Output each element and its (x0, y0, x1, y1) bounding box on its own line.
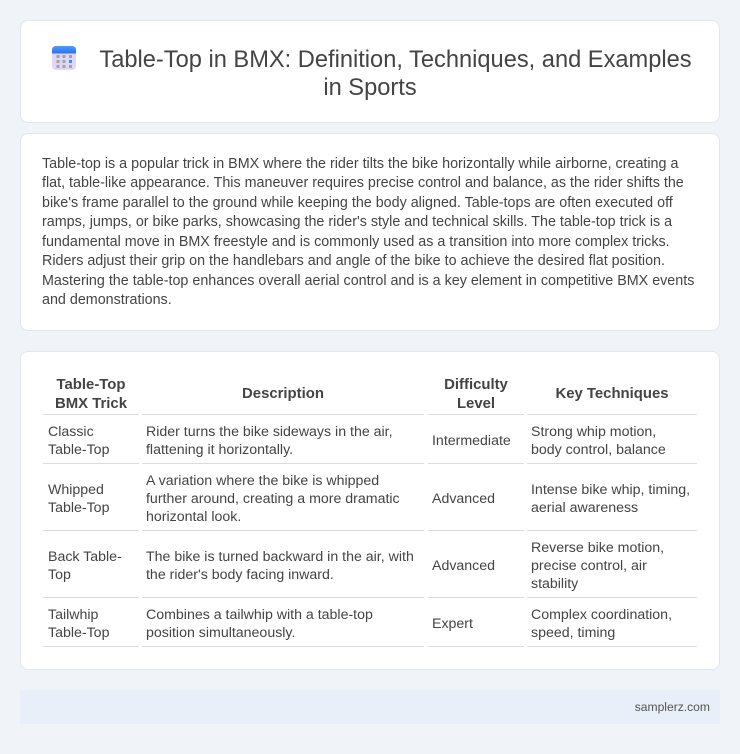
intro text: ramps, jumps, or bike parks, showcasing the rider's style and technical skills. The table-top trick is a (42, 214, 672, 230)
row: Classic Table-Top: Intermediate (432, 433, 511, 449)
intro text: Riders adjust their grip on the handlebars and angle of the bike to achieve the desired flat position. (42, 253, 665, 269)
row: Back Table-Top: Top (48, 567, 71, 583)
row: Back Table-Top: The bike is turned backward in the air, with (146, 549, 414, 565)
table header: Level (457, 396, 495, 412)
table header: Table-Top (57, 377, 125, 393)
table header: Difficulty (444, 377, 508, 393)
intro text: bike's frame parallel to the ground while keeping the body aligned. Table-tops are often executed off (42, 195, 673, 211)
row: Classic Table-Top: Table-Top (48, 442, 109, 458)
row: Back Table-Top: precise control, air (531, 558, 647, 574)
panel: intro paragraph (20, 133, 720, 331)
row: Tailwhip Table-Top: Combines a tailwhip with a table-top (146, 607, 373, 623)
intro text (42, 156, 694, 308)
row: Tailwhip Table-Top: Expert (432, 616, 473, 632)
table header (55, 377, 669, 412)
title: Table-Top in BMX: Definition, Techniques, and Examples (99, 47, 692, 73)
row: Tailwhip Table-Top: position simultaneously. (146, 625, 295, 641)
row: Whipped Table-Top (48, 473, 690, 525)
row: Tailwhip Table-Top: Tailwhip (48, 607, 98, 623)
title card (20, 20, 720, 123)
row: Back Table-Top: stability (531, 576, 578, 592)
icon: calendar grid (52, 46, 76, 70)
row: Classic Table-Top: Rider turns the bike sideways in the air, (146, 424, 393, 440)
title (99, 47, 692, 101)
row: Classic Table-Top: body control, balance (531, 442, 666, 458)
row: Back Table-Top: Reverse bike motion, (531, 540, 664, 556)
title: in Sports (323, 75, 417, 101)
row: Tailwhip Table-Top (48, 607, 672, 641)
row: Classic Table-Top: Strong whip motion, (531, 424, 656, 440)
row: Whipped Table-Top: further around, creating a more dramatic (146, 491, 400, 507)
row: Back Table-Top: the rider's body facing inward. (146, 567, 334, 583)
row: Tailwhip Table-Top: speed, timing (531, 625, 615, 641)
footer bar (20, 690, 720, 724)
row: Back Table-Top: Back Table- (48, 549, 122, 565)
table header: Description (242, 386, 324, 402)
row: Whipped Table-Top: Advanced (432, 491, 495, 507)
row: Classic Table-Top: Classic (48, 424, 94, 440)
table header: Key Techniques (555, 386, 669, 402)
intro text: flat, table-like appearance. This maneuver requires precise control and balance, as the rider shifts the (42, 175, 684, 191)
row: Tailwhip Table-Top: Complex coordination, (531, 607, 672, 623)
row: Whipped Table-Top: horizontal look. (146, 509, 241, 525)
row: Tailwhip Table-Top: Table-Top (48, 625, 109, 641)
row: Whipped Table-Top: Table-Top (48, 500, 109, 516)
row: Classic Table-Top (48, 424, 666, 458)
table: BMX tricks (43, 377, 697, 647)
row: Whipped Table-Top: Intense bike whip, timing, (531, 482, 690, 498)
intro text: Table-top is a popular trick in BMX where the rider tilts the bike horizontally while airborne, creating a (42, 156, 678, 172)
row: Back Table-Top: Advanced (432, 558, 495, 574)
footer source text: samplerz.com (635, 700, 710, 714)
intro text: fundamental move in BMX freestyle and is commonly used as a transition into more complex tricks. (42, 234, 670, 250)
intro text: and demonstrations. (42, 292, 172, 308)
intro text: Mastering the table-top enhances overall aerial control and is a key element in competitive BMX events (42, 273, 694, 289)
row: Whipped Table-Top: aerial awareness (531, 500, 638, 516)
row: Whipped Table-Top: Whipped (48, 482, 104, 498)
panel: table card (20, 351, 720, 670)
row: Whipped Table-Top: A variation where the bike is whipped (146, 473, 379, 489)
row: Back Table-Top (48, 540, 664, 592)
row: Classic Table-Top: flattening it horizontally. (146, 442, 293, 458)
table header: BMX Trick (55, 396, 127, 412)
